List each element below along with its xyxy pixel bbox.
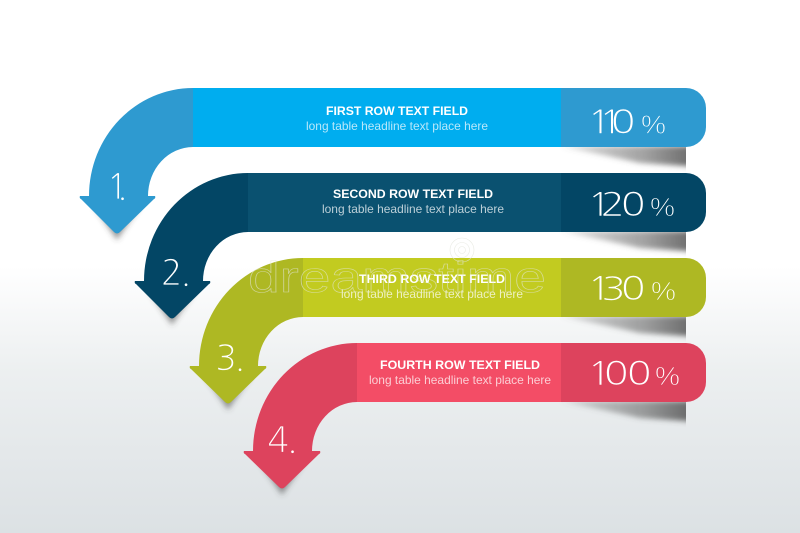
value tab — [561, 258, 706, 317]
arrowhead shadow — [205, 376, 251, 410]
percent sign: % — [641, 110, 666, 140]
middle text field — [248, 173, 561, 232]
middle text field — [357, 343, 561, 402]
arrowhead shadow — [94, 206, 140, 240]
percent sign: % — [651, 276, 676, 306]
watermark — [248, 238, 546, 302]
row subtitle: long table headline text place here — [322, 202, 504, 216]
watermark spiral icon — [450, 238, 474, 262]
row 1: first row arrow — [80, 88, 706, 240]
row subtitle: long table headline text place here — [341, 287, 523, 301]
middle text field — [303, 258, 561, 317]
watermark wordmark: dreamstime — [248, 253, 546, 302]
bar shadow — [561, 316, 700, 337]
row 4: fourth row arrow — [244, 343, 706, 495]
row subtitle: long table headline text place here — [369, 373, 551, 387]
curved arrow body — [190, 258, 303, 404]
bar shadow — [561, 146, 700, 167]
step number: 4. — [268, 423, 298, 458]
value tab — [561, 88, 706, 147]
row 3: third row arrow — [190, 258, 706, 410]
value tab — [561, 173, 706, 232]
percent sign: % — [655, 361, 680, 391]
arrowhead shadow — [149, 291, 195, 325]
value tab — [561, 343, 706, 402]
row subtitle: long table headline text place here — [306, 119, 488, 133]
row heading: FOURTH ROW TEXT FIELD — [380, 358, 540, 372]
bar shadow — [561, 231, 700, 252]
bar shadow — [561, 401, 700, 422]
middle text field — [193, 88, 561, 147]
row heading: FIRST ROW TEXT FIELD — [326, 104, 468, 118]
value: 110 — [587, 107, 635, 139]
curved arrow body — [135, 173, 248, 318]
step number: 2. — [161, 256, 191, 291]
value: 130 — [587, 274, 645, 305]
percent sign: % — [650, 192, 675, 222]
step number: 3. — [216, 341, 245, 376]
row heading: THIRD ROW TEXT FIELD — [359, 272, 505, 286]
arrowhead shadow — [259, 461, 305, 495]
value: 120 — [587, 190, 645, 221]
step number: 1. — [106, 170, 128, 205]
row 2: second row arrow — [135, 173, 706, 325]
curved arrow body — [80, 88, 193, 234]
curved arrow body — [244, 343, 357, 488]
row heading: SECOND ROW TEXT FIELD — [333, 187, 493, 201]
value: 100 — [587, 359, 651, 390]
